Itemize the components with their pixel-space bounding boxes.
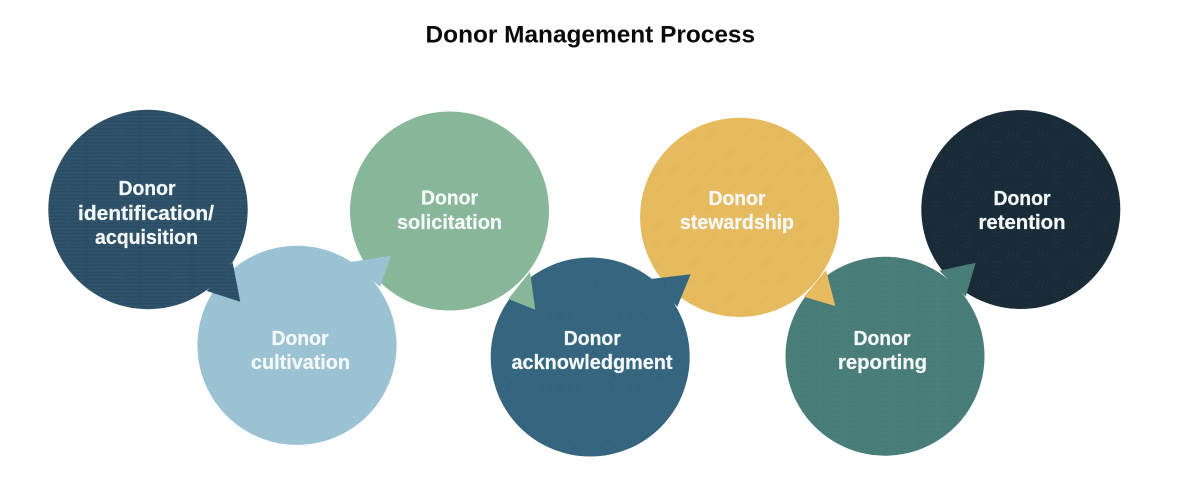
bubble: donor cultivation: Donor: [272, 328, 329, 350]
bubble: donor identification/acquisition: Donor: [118, 178, 176, 200]
bubble: donor identification/acquisition: acquisition: [95, 227, 198, 249]
bubble: donor solicitation: Donor: [421, 188, 478, 210]
bubble: donor cultivation: cultivation: [251, 352, 350, 374]
bubble: donor reporting: [786, 257, 984, 456]
bubble: donor retention: [921, 110, 1120, 309]
bubble: donor retention: Donor: [994, 188, 1051, 210]
bubble: donor acknowledgment: [491, 258, 691, 456]
bubble: donor acknowledgment: Donor: [564, 328, 621, 350]
bubble: donor acknowledgment: acknowledgment: [512, 352, 673, 374]
bubble: donor solicitation: solicitation: [397, 212, 502, 234]
bubble: donor solicitation: [350, 112, 549, 310]
bubble: donor identification/acquisition: [48, 110, 248, 309]
bubble: donor reporting: reporting: [838, 352, 927, 374]
bubble: donor stewardship: stewardship: [680, 212, 794, 234]
bubble: donor cultivation: [197, 246, 397, 445]
bubble: donor reporting: Donor: [854, 328, 911, 350]
bubble: donor stewardship: Donor: [708, 188, 766, 210]
bubble: donor stewardship: [640, 118, 839, 317]
bubble: donor retention: retention: [978, 212, 1066, 234]
title: Donor Management Process: [426, 21, 755, 48]
bubble: donor identification/acquisition: identification/: [78, 203, 214, 225]
